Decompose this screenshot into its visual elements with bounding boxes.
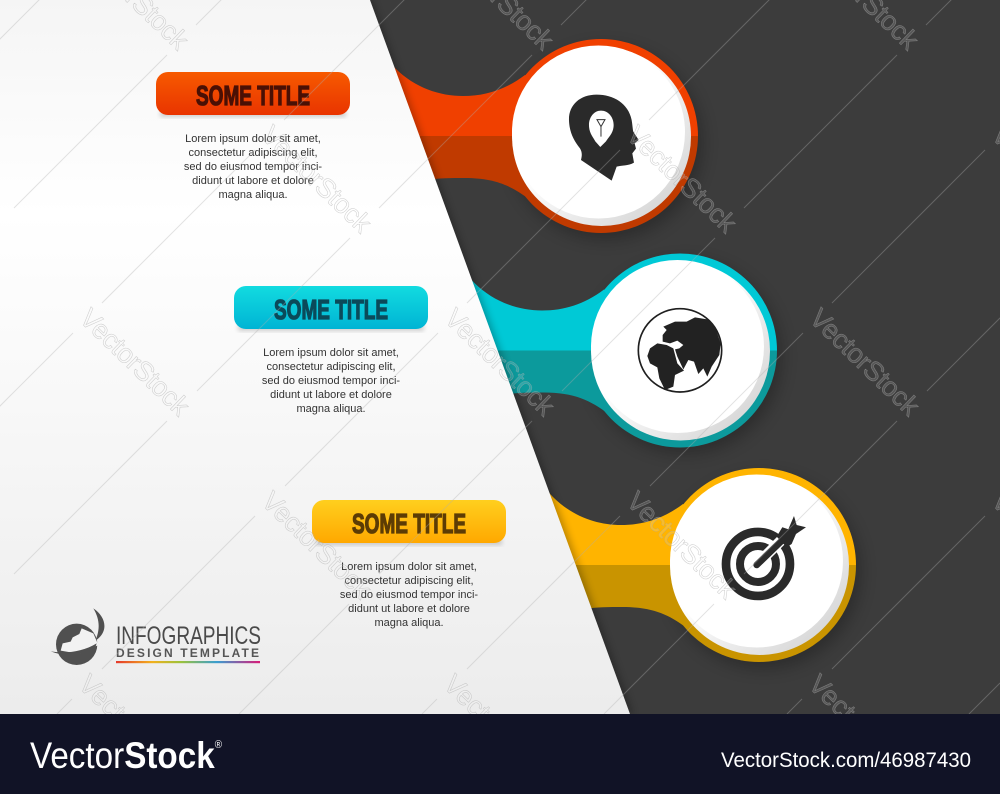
icon: target with arrow: [726, 516, 806, 596]
step 1 body text: consectetur adipiscing elit,: [188, 147, 318, 159]
watermarks: Vect: [438, 669, 497, 727]
step 1 white disc: [512, 46, 691, 226]
watermarks: VectorStock: [804, 303, 926, 422]
step 2 white disc: [591, 260, 770, 440]
footer bar: ®: [215, 739, 222, 751]
step 3 body text: consectetur adipiscing elit,: [344, 575, 474, 587]
step 2 title pill: SOME TITLE: [274, 294, 388, 325]
watermarks: VectorStock: [439, 303, 561, 422]
footer bar: VectorStock: [30, 735, 225, 776]
icon: head with light bulb: [569, 95, 639, 181]
step 2 body text: consectetur adipiscing elit,: [266, 361, 396, 373]
logo text: DESIGN TEMPLATE: [116, 646, 259, 660]
step 1 band and ring: orange: [380, 39, 703, 240]
step 2 title pill: [234, 286, 428, 331]
logo text: INFOGRAPHICS: [116, 622, 261, 650]
logo text: [116, 622, 261, 663]
watermarks: VectorStock: [74, 303, 196, 422]
footer bar: VectorStock.com/46987430: [721, 749, 971, 772]
step 3 body text: didunt ut labore et dolore: [348, 603, 470, 615]
footer bar: [0, 714, 1000, 794]
watermarks: Vect: [73, 669, 132, 727]
step 2 band and ring: teal: [459, 254, 782, 454]
step 1 title pill: [156, 72, 350, 117]
step 1 body text: magna aliqua.: [218, 189, 288, 201]
step 1 body text: Lorem ipsum dolor sit amet,: [185, 133, 321, 145]
step 1 body text: didunt ut labore et dolore: [192, 175, 314, 187]
step 2 body text: didunt ut labore et dolore: [270, 389, 392, 401]
icon: globe: [638, 309, 722, 392]
step 1 body text: sed do eiusmod tempor inci-: [184, 161, 322, 173]
step 2 body text: [262, 347, 400, 415]
logo icon: [51, 608, 104, 665]
step 3 body text: magna aliqua.: [374, 617, 444, 629]
step 1 body text: [184, 133, 322, 201]
white diagonal panel: [0, 0, 630, 714]
step 1 title pill: SOME TITLE: [196, 80, 310, 111]
step 3 body text: sed do eiusmod tempor inci-: [340, 589, 478, 601]
watermarks: VectorStock: [621, 486, 743, 605]
step 3 title pill: SOME TITLE: [352, 508, 466, 539]
step 3 white disc: [670, 474, 849, 655]
panel shadow: [0, 0, 633, 714]
watermarks: Vect: [803, 669, 862, 727]
step 3 body text: [340, 561, 478, 629]
step 3 title pill: [312, 500, 506, 545]
step 3 body text: Lorem ipsum dolor sit amet,: [341, 561, 477, 573]
watermarks: VectorStock: [256, 486, 378, 605]
watermarks: VectorStock: [621, 120, 743, 239]
step 2 body text: magna aliqua.: [296, 403, 366, 415]
step 3 band and ring: yellow: [538, 468, 861, 669]
step 2 body text: Lorem ipsum dolor sit amet,: [263, 347, 399, 359]
watermarks: VectorStock: [256, 120, 378, 239]
step 2 body text: sed do eiusmod tempor inci-: [262, 375, 400, 387]
